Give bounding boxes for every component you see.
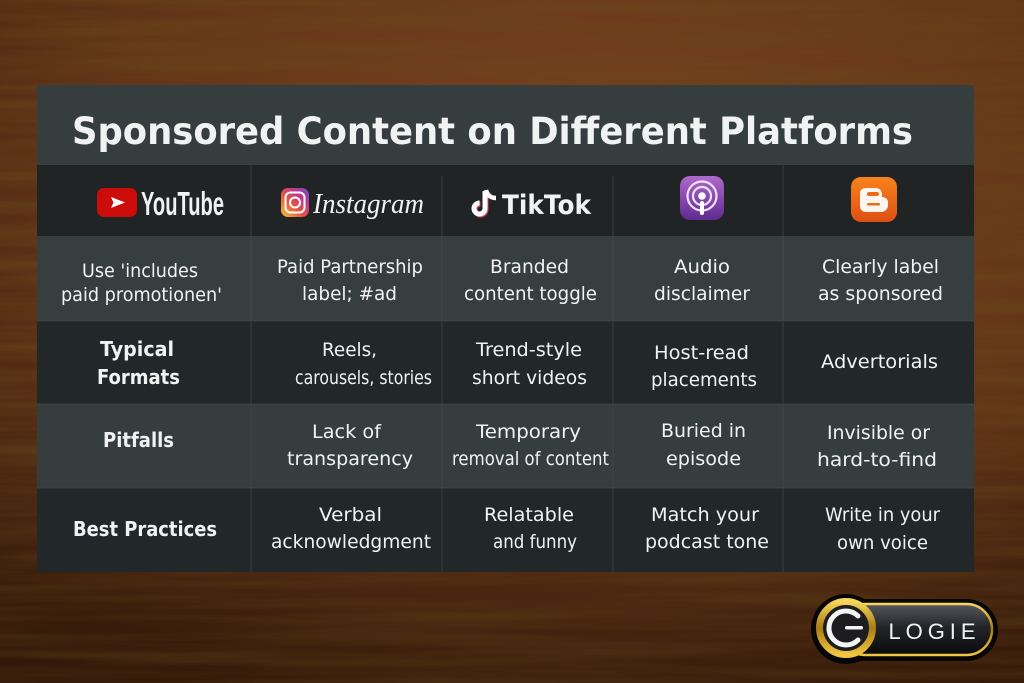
logo: TikTok: TikTok xyxy=(502,190,592,221)
row: disclosure: paid promotionen' xyxy=(61,284,222,306)
row: best practices: Relatable xyxy=(484,504,574,526)
row: disclosure: Clearly label xyxy=(822,256,939,278)
row: disclosure: Paid Partnership xyxy=(277,256,423,278)
row: typical formats: Trend-style xyxy=(475,339,582,361)
row: best practices: acknowledgment xyxy=(271,531,431,553)
icon: podcasts xyxy=(680,176,724,220)
row: best practices xyxy=(73,504,940,554)
row: pitfalls: Temporary xyxy=(475,421,581,443)
row: typical formats: placements xyxy=(651,369,757,391)
row: disclosure: Use 'includes xyxy=(82,260,198,282)
row: disclosure: label; #ad xyxy=(302,283,397,305)
row: disclosure: content toggle xyxy=(464,283,597,305)
row: typical formats: short videos xyxy=(472,367,587,389)
row: disclosure: disclaimer xyxy=(654,283,750,305)
row: typical formats: Formats xyxy=(97,365,180,389)
row: typical formats: Typical xyxy=(100,337,174,361)
row: pitfalls: hard-to-find xyxy=(817,449,937,471)
row: pitfalls: episode xyxy=(666,448,741,470)
row: pitfalls: Invisible or xyxy=(827,422,930,444)
row: best practices: Match your xyxy=(651,504,759,526)
row: best practices: Write in your xyxy=(825,504,940,526)
row: disclosure xyxy=(61,256,943,306)
logo: YouTube xyxy=(97,185,224,222)
logo badge: LOGIE xyxy=(811,594,998,664)
row: typical formats: Reels, xyxy=(322,339,377,361)
row: pitfalls: transparency xyxy=(287,448,413,470)
row: best practices: Best Practices xyxy=(73,517,217,541)
row: disclosure: as sponsored xyxy=(818,283,943,305)
row: disclosure: Branded xyxy=(490,256,569,278)
row: pitfalls: removal of content xyxy=(452,448,609,470)
row: best practices: and funny xyxy=(493,531,577,553)
row: typical formats xyxy=(97,337,938,391)
logo badge: LOGIE: LOGIE xyxy=(888,619,976,644)
logo: Instagram: Instagram xyxy=(312,188,424,220)
row: best practices: Verbal xyxy=(319,504,382,526)
row: disclosure: Audio xyxy=(674,256,730,278)
logo: YouTube: YouTube xyxy=(141,185,224,222)
row: typical formats: carousels, stories xyxy=(295,367,432,389)
row: typical formats: Advertorials xyxy=(821,351,938,373)
row: pitfalls: Pitfalls xyxy=(103,428,174,452)
row: pitfalls: Buried in xyxy=(661,420,746,442)
panel: comparison table xyxy=(37,85,974,572)
row: pitfalls: Lack of xyxy=(312,421,382,443)
row: best practices: own voice xyxy=(837,532,928,554)
row: typical formats: Host-read xyxy=(654,342,749,364)
title: Sponsored Content on Different Platforms xyxy=(72,110,913,153)
icon: Blogger xyxy=(851,177,897,222)
row: best practices: podcast tone xyxy=(645,531,769,553)
row: pitfalls xyxy=(103,420,937,471)
